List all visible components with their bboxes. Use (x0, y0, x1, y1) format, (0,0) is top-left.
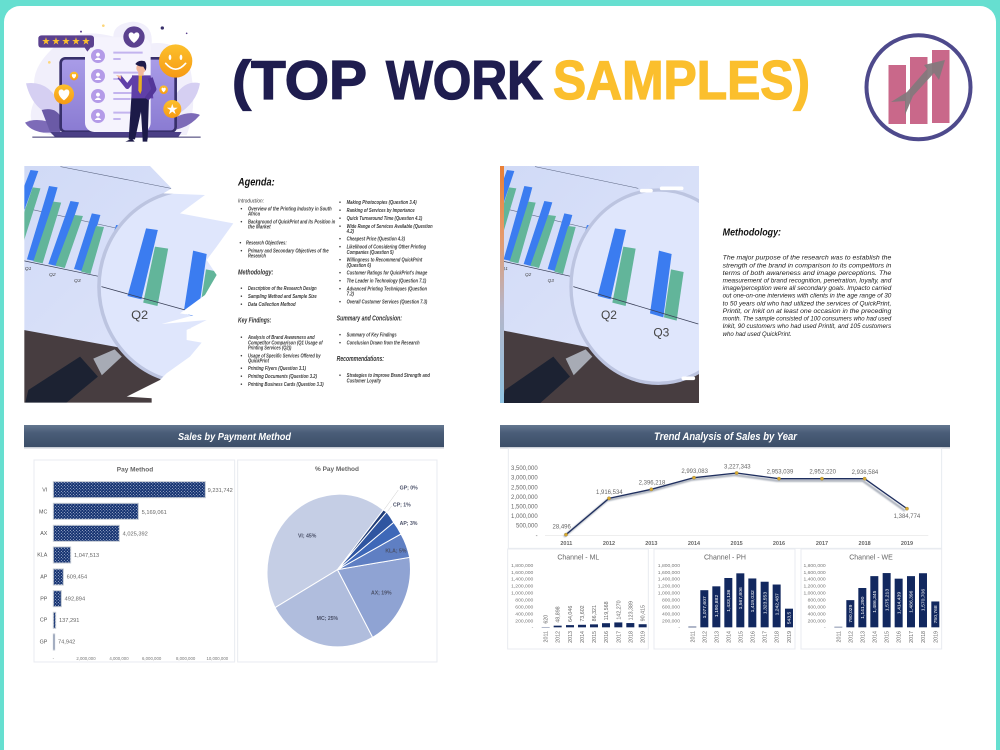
y axis: 400,000 (808, 611, 826, 617)
chart: pay method pie: % Pay Method (315, 466, 359, 473)
agenda right column: Companies (Question 5) (347, 250, 394, 256)
value labels (702, 587, 793, 624)
value labels: 4,025,392 (123, 531, 148, 537)
y axis: 1,200,000 (658, 584, 680, 590)
chart: channel WE (801, 549, 942, 649)
value labels: 90,415 (641, 605, 647, 621)
year labels: 2016 (750, 631, 756, 643)
agenda right column: • (339, 271, 341, 277)
axis labels (511, 466, 538, 539)
value labels: 1,414,439 (896, 592, 902, 614)
chart: sales trend line (508, 448, 942, 548)
agenda right column: • (339, 224, 341, 230)
agenda right column: • (339, 340, 341, 346)
year labels: 2012 (603, 541, 615, 547)
pie labels: CP; 1% (393, 502, 411, 508)
category labels: KLA (37, 553, 48, 559)
value labels: 1,486,345 (872, 590, 878, 613)
year labels: 2012 (702, 631, 708, 643)
bars (53, 482, 205, 650)
figure: presenter (116, 61, 154, 142)
banner: trend analysis: Trend Analysis of Sales by Year (654, 431, 798, 443)
year labels: 2011 (836, 631, 842, 642)
icon: smiley (159, 44, 192, 78)
agenda right column: Customer Loyalty (347, 378, 382, 384)
category labels: MC (39, 509, 47, 515)
axis labels: 1,000,000 (511, 514, 538, 520)
data labels: 2,936,584 (852, 470, 879, 476)
agenda right column: Summary and Conclusion: (337, 313, 402, 322)
year labels: 2017 (616, 631, 622, 643)
year labels: 2011 (544, 631, 550, 642)
y axis: - (824, 625, 826, 631)
methodology paragraph: Printit, or Inkit on at least one occasion in the preceding (723, 309, 892, 315)
value labels: 750,768 (933, 605, 939, 623)
value labels: 137,291 (59, 618, 79, 624)
agenda right column: • (339, 258, 341, 264)
title: SAMPLES) (553, 49, 810, 111)
value labels: 1,567,806 (738, 587, 744, 609)
banner: sales by payment method (24, 425, 444, 448)
methodology paragraph: Inkit, 90 customers who had used Printit, and 105 customers (723, 324, 891, 330)
agenda right column: Ranking of Services by Importance (347, 208, 415, 214)
bars (834, 573, 939, 627)
agenda right column: Wide Range of Services Available (Question (347, 224, 433, 230)
accent strip (500, 166, 504, 403)
agenda right column: • (339, 279, 341, 285)
panel: agenda slide photo (24, 166, 233, 403)
data labels: 1,384,774 (894, 514, 921, 520)
year labels: 2017 (909, 631, 915, 643)
agenda right column: • (339, 216, 341, 222)
illustration: customer reviews (25, 22, 201, 142)
y axis: - (532, 625, 534, 631)
axis labels: - (536, 533, 538, 539)
agenda left column: Research Objectives: (246, 240, 287, 246)
agenda right column: Overall Customer Services (Question 7.3) (347, 300, 427, 306)
category labels: GP (40, 639, 48, 645)
axis labels: 3,000,000 (511, 476, 538, 482)
panel: agenda slide photo: Q2 (131, 308, 148, 322)
value labels: 119,568 (604, 601, 610, 620)
panel: methodology slide photo: Q2 (525, 272, 532, 277)
axis labels: 500,000 (516, 524, 538, 530)
y axis (511, 563, 534, 631)
year labels: 2012 (556, 631, 562, 643)
year labels: 2018 (775, 631, 781, 643)
methodology paragraph: measurement of brand recognition, penetration, loyalty, and (723, 279, 892, 285)
value labels: 1,433,136 (726, 589, 732, 612)
pie labels: VI; 45% (298, 533, 317, 539)
pie labels: AX; 19% (371, 591, 392, 597)
chart: pay method pie (238, 460, 437, 662)
value labels: 543,5 (787, 612, 793, 624)
data labels: 2,953,039 (767, 469, 794, 475)
pie labels (298, 486, 418, 622)
value labels: 1,323,553 (762, 592, 768, 614)
y axis: 1,000,000 (658, 591, 680, 597)
pie labels: MC; 25% (317, 616, 339, 622)
y axis: 200,000 (515, 618, 534, 624)
year labels: 2016 (773, 541, 785, 547)
agenda right column: Customer Ratings for QuickPrint's Image (347, 271, 427, 277)
title: (TOP (232, 49, 367, 111)
agenda left column: • (239, 240, 241, 246)
chart: pay method bars: Pay Method (117, 466, 153, 473)
value labels: 1,242,487 (774, 593, 780, 615)
agenda left column: Data Collection Method (248, 302, 296, 308)
value labels: 48,898 (556, 606, 562, 623)
methodology paragraph: The major purpose of the research was to establish the (723, 256, 892, 262)
value labels: 1,077,607 (702, 596, 708, 618)
agenda left column: • (240, 382, 242, 388)
y axis (803, 563, 826, 631)
agenda left column: Africa (247, 212, 260, 218)
y axis: 1,000,000 (511, 591, 534, 597)
panel: agenda slide photo: Q1 (25, 266, 32, 272)
value labels: 74,942 (58, 640, 75, 646)
methodology paragraph (723, 256, 892, 338)
five star rating bubble: ★ (72, 36, 81, 47)
y axis: 200,000 (808, 618, 826, 624)
y axis: 1,400,000 (658, 577, 680, 583)
value axis: - (53, 656, 55, 661)
methodology paragraph: month. The sample consisted of 100 consumers who had used (723, 316, 892, 322)
agenda right column: • (339, 332, 341, 338)
value labels: 9,231,742 (208, 488, 233, 494)
agenda right column: The Leader in Technology (Question 7.1) (347, 279, 426, 285)
value axis: 6,000,000 (142, 656, 162, 661)
y axis: 1,600,000 (803, 570, 826, 576)
agenda left column: Printing Services (Q2)) (248, 345, 291, 351)
agenda right column: • (339, 286, 341, 292)
agenda left column: • (240, 353, 242, 359)
panel: agenda slide photo: Q3 (187, 326, 204, 340)
agenda left column: • (240, 302, 242, 308)
data labels: 2,952,220 (809, 470, 837, 476)
category labels (37, 487, 48, 645)
y axis: 1,000,000 (803, 591, 826, 597)
axis labels: 2,000,000 (511, 495, 538, 501)
y axis: 1,200,000 (511, 584, 534, 590)
agenda left column: Key Findings: (238, 316, 272, 325)
agenda right column: (Question 6) (347, 263, 371, 269)
year labels: 2014 (872, 631, 878, 643)
panel: methodology slide photo: Q3 (653, 326, 670, 340)
agenda right column: Cheapest Price (Question 4.3) (347, 237, 405, 243)
agenda left column: • (240, 219, 242, 225)
value axis: 8,000,000 (176, 656, 196, 661)
five star rating bubble: ★ (62, 36, 71, 47)
year labels: 2014 (580, 631, 586, 643)
five star rating bubble: ★ (82, 36, 91, 47)
agenda right column: • (339, 237, 341, 243)
agenda left column: Introduction: (238, 198, 264, 204)
y axis: 1,800,000 (511, 563, 534, 569)
year labels: 2011 (690, 631, 696, 642)
agenda left column: • (240, 294, 242, 300)
agenda left column: the Market (248, 225, 271, 231)
year labels: 2016 (897, 631, 903, 643)
agenda right column: Quick Turnaround Time (Question 4.1) (347, 216, 422, 222)
year labels (544, 631, 647, 643)
agenda right column: Recommendations: (337, 354, 384, 363)
y axis: 600,000 (808, 604, 826, 610)
y axis (658, 563, 680, 631)
value labels: 1,190,882 (714, 595, 720, 617)
agenda right column: Strategies to Improve Brand Strength and (347, 373, 431, 379)
panel: agenda slide photo: Q3 (74, 278, 81, 284)
chart: pay method bars (34, 460, 235, 662)
agenda right column: • (339, 208, 341, 214)
value labels: 1,419,032 (750, 590, 756, 612)
value labels: 123,389 (628, 601, 634, 620)
agenda right column: Summary of Key Findings (347, 332, 397, 338)
y axis: 800,000 (515, 597, 534, 603)
agenda left column: • (240, 206, 242, 212)
value labels (544, 600, 647, 624)
year labels: 2016 (604, 631, 610, 643)
pie labels: GP; 0% (400, 486, 418, 492)
year labels: 2013 (860, 631, 866, 643)
agenda left column (238, 198, 336, 388)
agenda right column: • (339, 300, 341, 306)
y axis: 800,000 (662, 597, 680, 603)
year labels: 2018 (921, 631, 927, 643)
year labels: 2018 (628, 631, 634, 643)
value labels: 1,141,290 (860, 596, 866, 619)
y axis: 600,000 (515, 604, 534, 610)
agenda right column: • (339, 245, 341, 251)
year labels: 2017 (816, 541, 828, 547)
methodology paragraph: terms of both awareness and image perceptions. The (723, 271, 892, 277)
year labels: 2018 (859, 541, 871, 547)
icon: heart badge (123, 26, 145, 48)
year labels: 2014 (726, 631, 732, 643)
y axis: 400,000 (662, 611, 680, 617)
y axis: - (678, 625, 680, 631)
agenda left column: Printing Business Cards (Question 3.3) (248, 382, 324, 388)
pie slices (267, 494, 410, 647)
value labels: 1,486,396 (909, 590, 915, 613)
agenda left column: Sampling Method and Sample Size (248, 294, 317, 300)
chart: channel PH: Channel - PH (704, 554, 746, 561)
agenda left column: Overview of the Printing Industry in South (248, 206, 332, 212)
title (232, 49, 810, 111)
year labels: 2013 (645, 541, 657, 547)
methodology paragraph: to 50 years old who had utilized the services of QuickPrint, (723, 301, 891, 307)
agenda right column: Making Photocopies (Question 3.4) (347, 200, 417, 206)
agenda left column: Usage of Specific Services Offered by (248, 353, 321, 359)
markers (564, 471, 909, 536)
data labels: 2,396,218 (639, 480, 666, 486)
value labels: 1,575,213 (884, 589, 890, 611)
agenda right column: Conclusion Drawn from the Research (347, 340, 420, 346)
panel: methodology slide photo: Q3 (548, 278, 554, 283)
value labels: 790,029 (848, 604, 854, 623)
year labels: 2013 (714, 631, 720, 643)
year labels: 2019 (901, 541, 913, 547)
y axis: 600,000 (662, 604, 680, 610)
agenda left column: • (240, 366, 242, 372)
trend line (566, 473, 907, 535)
five star rating bubble: ★ (52, 36, 61, 47)
y axis: 1,600,000 (658, 570, 680, 576)
panel: methodology text (723, 228, 892, 338)
value labels: 620 (544, 615, 550, 624)
y axis: 400,000 (515, 611, 534, 617)
year labels (690, 631, 793, 643)
value labels (58, 488, 233, 646)
agenda left column: Printing Flyers (Question 3.1) (248, 366, 306, 372)
y axis: 1,400,000 (511, 577, 534, 583)
year labels: 2011 (560, 541, 572, 547)
year labels: 2015 (592, 631, 598, 643)
axis labels: 2,500,000 (511, 485, 538, 491)
value labels: 609,454 (67, 575, 87, 581)
methodology paragraph: out one-on-one interviews with clients in the age range of 30 (723, 294, 892, 300)
year labels: 2013 (568, 631, 574, 643)
agenda right column: 7.2) (347, 292, 354, 298)
data labels: 28,496 (553, 525, 571, 531)
value labels: 64,046 (568, 606, 574, 622)
chart: channel ML (508, 549, 648, 649)
data labels: 1,916,534 (596, 490, 623, 496)
review list rows (91, 49, 143, 123)
panel: methodology slide photo: Q2 (601, 308, 617, 322)
chart: channel ML: Channel - ML (557, 554, 599, 561)
category labels: VI (42, 487, 47, 493)
y axis: 200,000 (662, 618, 680, 624)
agenda left column: • (240, 335, 242, 341)
agenda right column: • (339, 200, 341, 206)
year labels: 2015 (731, 541, 743, 547)
banner: trend analysis (500, 425, 950, 448)
year labels: 2019 (787, 631, 793, 643)
banner: sales by payment method: Sales by Payment Method (178, 431, 292, 443)
axis labels: 1,500,000 (511, 505, 538, 511)
methodology paragraph: image/perception were all secondary goals. Impacto carried (723, 286, 892, 292)
value labels: 142,270 (616, 600, 622, 620)
methodology paragraph: who had used QuickPrint. (723, 332, 792, 338)
agenda right column: • (339, 373, 341, 379)
value labels: 86,321 (592, 605, 598, 621)
agenda right column: 4.2) (346, 229, 354, 235)
heading: agenda: Agenda: (237, 177, 275, 189)
agenda left column: Primary and Secondary Objectives of the (248, 248, 329, 254)
year labels: 2019 (933, 631, 939, 643)
chart: channel WE: Channel - WE (849, 554, 893, 561)
five star rating bubble (38, 35, 94, 52)
year labels: 2015 (885, 631, 891, 643)
agenda left column: QuickPrint (248, 358, 269, 364)
chart: channel PH (654, 549, 795, 649)
agenda left column: • (240, 374, 242, 380)
agenda left column: Competitor Comparison (Q1 Usage of (248, 340, 324, 346)
methodology paragraph: strength of the brand in comparison to its competitors in (723, 263, 892, 269)
bars (542, 622, 647, 627)
pie labels: KLA; 5% (385, 549, 407, 555)
agenda left column: Background of QuickPrint and its Position in (248, 219, 336, 225)
agenda right column: Advanced Printing Techniques (Question (346, 286, 428, 292)
data labels: 3,227,343 (724, 464, 751, 470)
value labels: 1,047,513 (74, 553, 99, 559)
axis labels: 3,500,000 (511, 466, 538, 472)
y axis: 1,600,000 (511, 570, 534, 576)
y axis: 1,800,000 (658, 563, 680, 569)
icon: gold badges (54, 72, 181, 118)
y axis: 800,000 (808, 597, 826, 603)
value labels: 73,602 (580, 605, 586, 622)
year labels: 2019 (641, 631, 647, 643)
data labels (553, 464, 921, 531)
bars (688, 573, 793, 627)
pie labels: AP; 3% (400, 521, 418, 527)
year labels (560, 541, 913, 547)
agenda left column: Printing Documents (Question 3.2) (248, 374, 317, 380)
agenda left column: • (240, 248, 242, 254)
category labels: PP (40, 596, 48, 602)
category labels: AP (40, 575, 48, 581)
agenda left column: Methodology: (238, 267, 274, 276)
agenda right column (337, 200, 433, 384)
panel: methodology slide photo (504, 166, 699, 403)
panel: agenda slide photo: Q2 (49, 272, 56, 278)
value axis: 4,000,000 (109, 656, 129, 661)
category labels: AX (40, 531, 48, 537)
agenda right column: Willingness to Recommend QuickPrint (347, 258, 422, 264)
data labels: 2,993,083 (681, 469, 709, 475)
five star rating bubble: ★ (42, 36, 51, 47)
panel: methodology slide photo: Q1 (502, 266, 508, 271)
y axis: 1,400,000 (803, 577, 826, 583)
value labels (848, 589, 939, 623)
agenda left column: Analysis of Brand Awareness and (247, 335, 315, 341)
value axis (53, 656, 229, 661)
agenda left column: • (240, 286, 242, 292)
year labels (836, 631, 939, 643)
agenda left column: Description of the Research Design (248, 286, 317, 292)
value labels: 1,570,706 (921, 589, 927, 611)
category labels: CP (40, 618, 48, 624)
agenda left column: Research (248, 253, 267, 259)
logo: growth chart in circle (866, 35, 970, 139)
value axis: 2,000,000 (76, 656, 96, 661)
icon: gold badges: ★ (166, 101, 179, 117)
value labels: 492,894 (65, 596, 85, 602)
heading: methodology: Methodology: (723, 228, 781, 239)
agenda right column: Likelihood of Considering Other Printing (347, 245, 427, 251)
value axis: 10,000,000 (206, 656, 229, 661)
y axis: 1,800,000 (803, 563, 826, 569)
year labels: 2015 (738, 631, 744, 643)
year labels: 2012 (848, 631, 854, 643)
panel: agenda text (237, 177, 433, 388)
value labels: 5,169,061 (142, 510, 167, 516)
y axis: 1,200,000 (803, 584, 826, 590)
year labels: 2017 (763, 631, 769, 643)
title: WORK (386, 49, 543, 111)
year labels: 2014 (688, 541, 701, 547)
